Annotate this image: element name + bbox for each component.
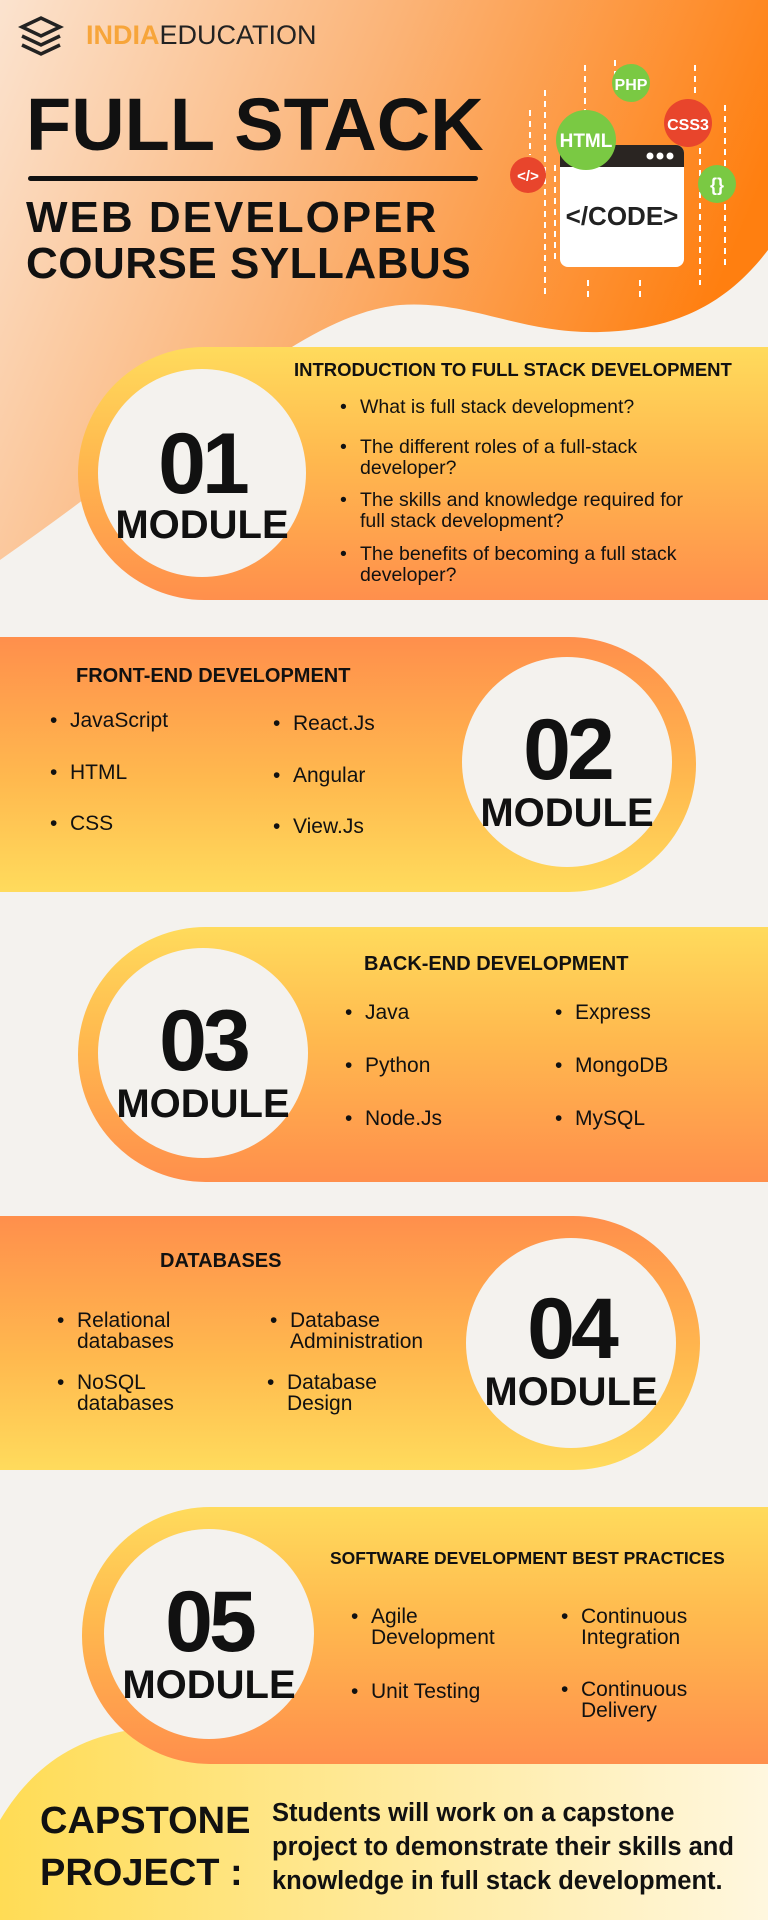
bullet list: The skills and knowledge required for xyxy=(360,489,683,511)
bullet list xyxy=(58,1309,423,1415)
circle: 03 module xyxy=(98,948,308,1158)
bullet list: databases xyxy=(77,1330,174,1353)
capstone title: PROJECT : xyxy=(40,1852,243,1894)
circle: 04 module: 04 xyxy=(527,1281,615,1377)
icon: code window with tech badges: CSS3 xyxy=(667,117,709,134)
capstone description xyxy=(272,1799,734,1895)
bullet list: Python xyxy=(365,1054,430,1077)
circle: 05 module xyxy=(104,1529,314,1739)
capstone description: Students will work on a capstone xyxy=(272,1799,674,1827)
heading: BACK-END DEVELOPMENT xyxy=(364,953,628,975)
bullet list xyxy=(50,709,375,838)
circle: 04 module: MODULE xyxy=(484,1370,658,1414)
capstone title: CAPSTONE xyxy=(40,1800,250,1842)
circle: 01 module xyxy=(98,369,306,577)
circle: 01 module: 01 xyxy=(158,416,246,512)
circle: 04 module xyxy=(466,1238,676,1448)
bullet list: Angular xyxy=(293,764,365,787)
logo xyxy=(18,16,317,56)
heading: DATABASES xyxy=(160,1250,281,1272)
bullet list: Continuous xyxy=(581,1605,687,1628)
bullet list: full stack development? xyxy=(360,510,564,532)
bullet list: Express xyxy=(575,1001,651,1024)
panel: module 01 xyxy=(78,347,768,600)
heading: INTRODUCTION TO FULL STACK DEVELOPMENT xyxy=(294,359,732,380)
bullet list: Administration xyxy=(290,1330,423,1353)
title: FULL STACK xyxy=(26,83,484,166)
circle: 02 module: MODULE xyxy=(480,791,654,835)
icon: stacked layers xyxy=(18,16,64,56)
header background blob xyxy=(0,0,768,560)
logo text: INDIAEDUCATION xyxy=(86,20,317,50)
bullet list: Delivery xyxy=(581,1699,657,1722)
heading: FRONT-END DEVELOPMENT xyxy=(76,665,350,687)
bullet list: HTML xyxy=(70,761,127,784)
bullet list: Integration xyxy=(581,1626,680,1649)
bullet list: Node.Js xyxy=(365,1107,442,1130)
bullet list: Development xyxy=(371,1626,495,1649)
bullet list: Database xyxy=(287,1371,377,1394)
bullet list: Relational xyxy=(77,1309,170,1332)
bullet list: NoSQL xyxy=(77,1371,146,1394)
bullet list: databases xyxy=(77,1392,174,1415)
panel: module 04 xyxy=(0,1216,700,1470)
icon: code window with tech badges: </> xyxy=(517,168,539,185)
circle: 05 module: 05 xyxy=(165,1574,253,1670)
capstone background xyxy=(0,1731,768,1920)
panel: module 05 xyxy=(82,1507,768,1764)
icon: code window with tech badges: HTML xyxy=(560,131,613,152)
icon: code window with tech badges xyxy=(510,60,736,297)
bullet list: Database xyxy=(290,1309,380,1332)
circle: 02 module: 02 xyxy=(523,702,611,798)
circle: 03 module: 03 xyxy=(159,993,247,1089)
bullet list: developer? xyxy=(360,564,456,586)
capstone description: project to demonstrate their skills and xyxy=(272,1833,734,1861)
capstone title xyxy=(40,1800,250,1894)
icon: code window with tech badges: </CODE> xyxy=(566,201,678,231)
circle: 01 module: MODULE xyxy=(115,503,289,547)
capstone description: knowledge in full stack development. xyxy=(272,1867,723,1895)
title xyxy=(26,83,484,288)
heading: SOFTWARE DEVELOPMENT BEST PRACTICES xyxy=(330,1548,725,1568)
title: COURSE SYLLABUS xyxy=(26,239,471,288)
bullet list: Unit Testing xyxy=(371,1680,480,1703)
icon: code window with tech badges: PHP xyxy=(615,77,648,94)
circle: 03 module: MODULE xyxy=(116,1082,290,1126)
bullet list xyxy=(352,1605,687,1722)
bullet list: MongoDB xyxy=(575,1054,668,1077)
bullet list: Continuous xyxy=(581,1678,687,1701)
bullet list: Design xyxy=(287,1392,352,1415)
circle: 05 module: MODULE xyxy=(122,1663,296,1707)
bullet list xyxy=(346,1001,668,1130)
bullet list: The different roles of a full-stack xyxy=(360,436,637,458)
bullet list: CSS xyxy=(70,812,113,835)
circle: 02 module xyxy=(462,657,672,867)
panel: module 02 xyxy=(0,637,696,892)
title: WEB DEVELOPER xyxy=(26,193,438,242)
bullet list: developer? xyxy=(360,457,456,479)
icon: code window with tech badges: {} xyxy=(710,175,724,195)
bullet list: React.Js xyxy=(293,712,375,735)
panel: module 03 xyxy=(78,927,768,1182)
bullet list: Java xyxy=(365,1001,409,1024)
bullet list: The benefits of becoming a full stack xyxy=(360,543,677,565)
bullet list: JavaScript xyxy=(70,709,168,732)
bullet list: Agile xyxy=(371,1605,418,1628)
bullet list: What is full stack development? xyxy=(360,396,634,418)
bullet list: MySQL xyxy=(575,1107,645,1130)
bullet list xyxy=(340,396,683,586)
bullet list: View.Js xyxy=(293,815,364,838)
